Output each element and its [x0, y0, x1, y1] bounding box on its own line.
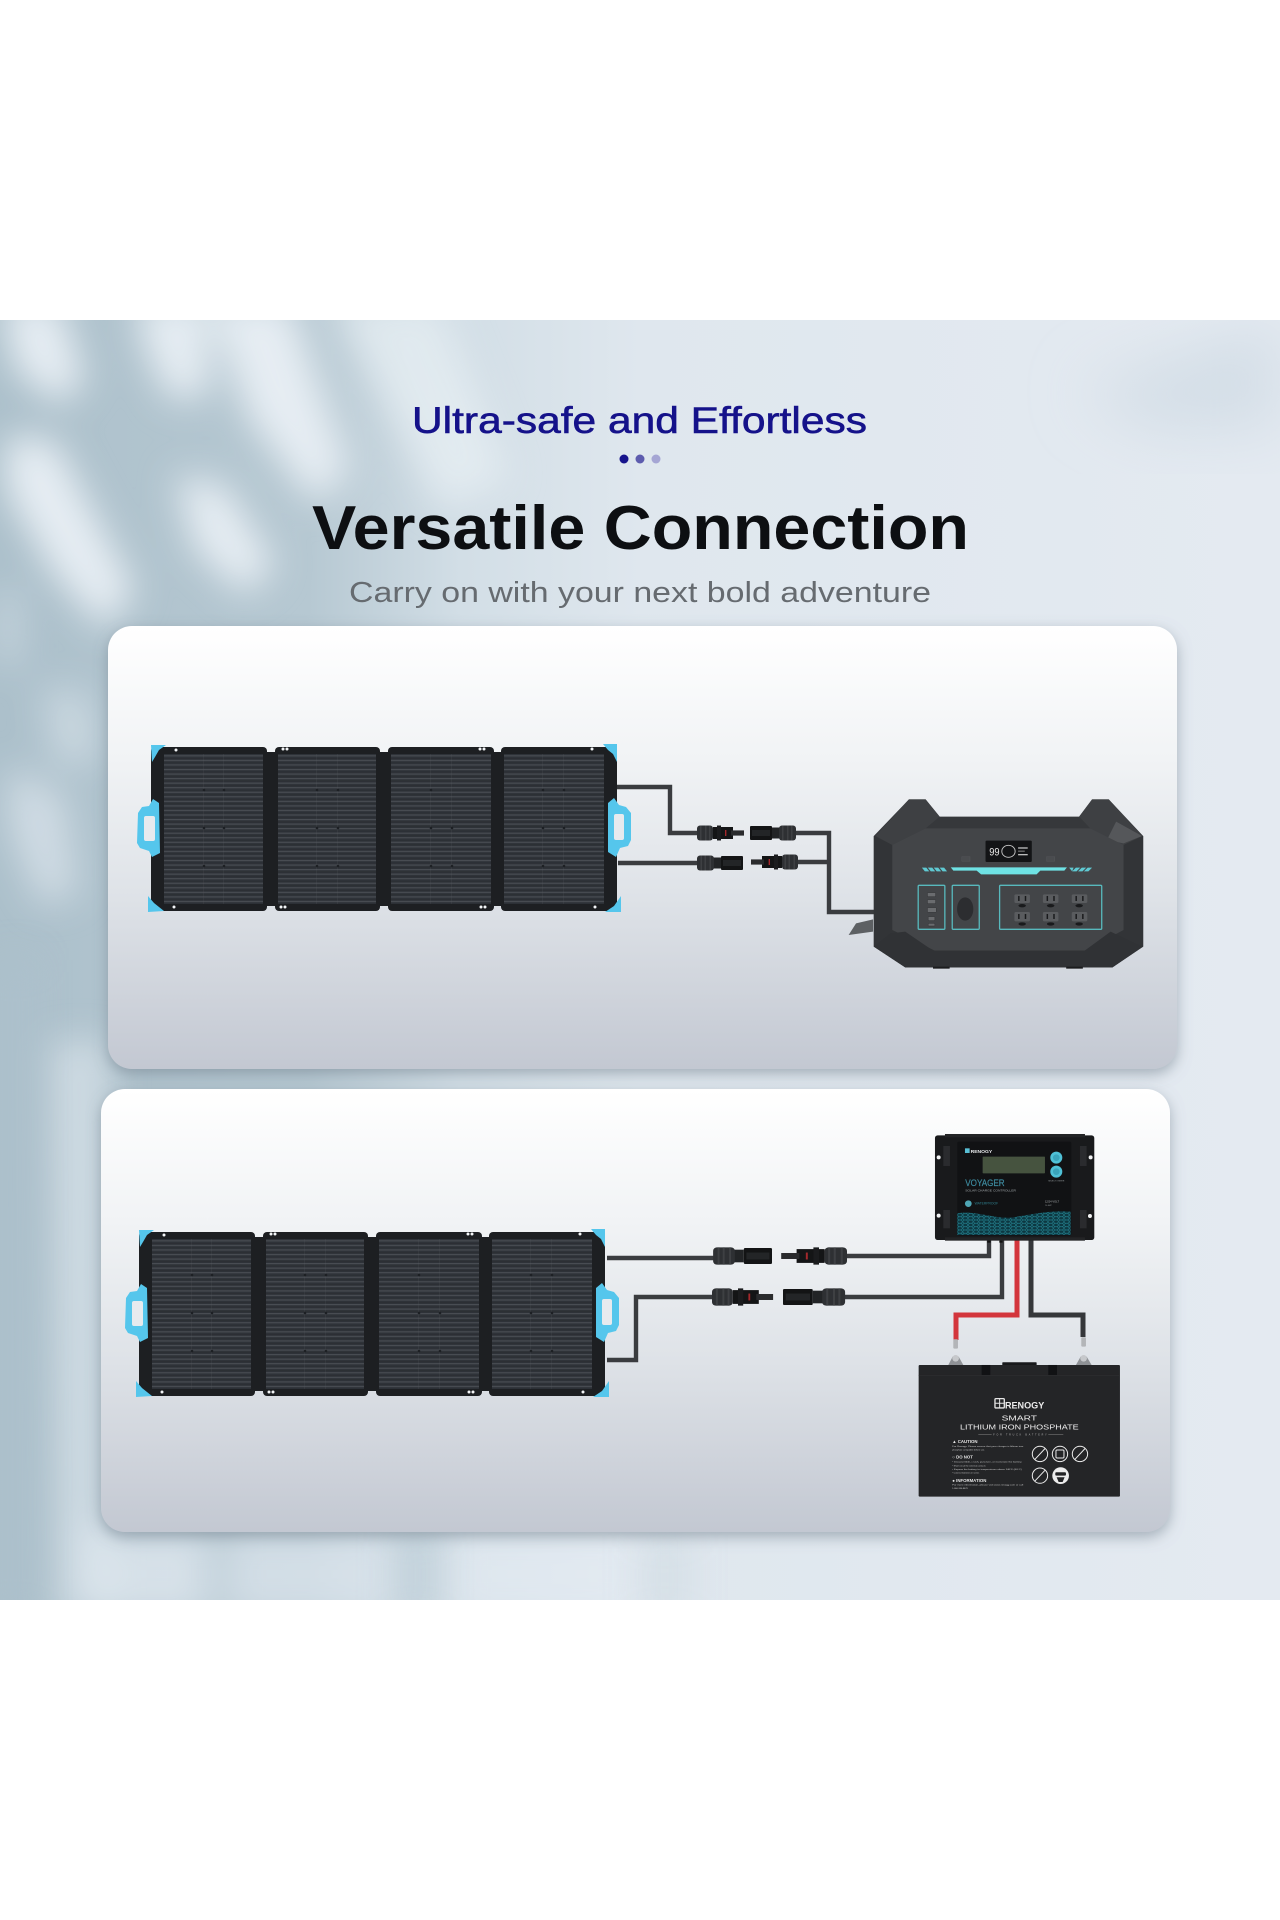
- feet: [933, 967, 950, 969]
- connector pair top: [713, 1247, 847, 1265]
- main title: Versatile Connection: [312, 494, 969, 563]
- icon: lithium battery: • Connect batteries in series: [952, 1472, 979, 1475]
- icon: charge controller: 20 AMP: [1045, 1204, 1053, 1207]
- icon: lithium battery: LITHIUM IRON PHOSPHATE: [960, 1422, 1079, 1431]
- kickstand: [849, 919, 873, 935]
- icon: lithium battery: ○ DO NOT: [952, 1455, 973, 1460]
- icon: lithium battery: 1-800-330-8678: [952, 1488, 968, 1490]
- display: [986, 841, 1032, 862]
- icon: lithium battery: • Expose the battery to temperatures above 140°F (60°C): [952, 1468, 1022, 1471]
- icon: portable power station: [849, 799, 1143, 969]
- three decorative dots: [620, 454, 660, 464]
- icon: lithium battery: • Disassemble, crush, puncture, or incinerate the battery: [952, 1461, 1023, 1464]
- terminals: [948, 1337, 1092, 1365]
- icon: charge controller: RENOGY: [971, 1149, 993, 1155]
- solar panel 1: [137, 744, 631, 912]
- cables to power station: [617, 787, 874, 912]
- teal light bar: [951, 867, 1067, 874]
- icon: lithium battery: ● INFORMATION: [952, 1478, 986, 1483]
- icon: charge controller: SOLAR CHARGE CONTROLLER: [965, 1188, 1017, 1192]
- DC socket: [957, 897, 973, 921]
- connector pair bottom: [712, 1288, 845, 1306]
- icon: lithium battery: • Short circuit the external contacts: [952, 1464, 986, 1467]
- icon: charge controller: VOYAGER: [965, 1178, 1005, 1188]
- icon: lithium battery: For more information, please visit www.renogy.com or call: [952, 1484, 1024, 1487]
- icon: portable power station: 99: [989, 847, 1000, 858]
- solar cables to controller: [607, 1240, 1002, 1360]
- icon: lithium battery: phosphate compatible before use.: [952, 1448, 985, 1451]
- battery cable black: [1031, 1238, 1083, 1337]
- background band with leaf shadows: [0, 300, 1280, 1620]
- safety icons: [1032, 1446, 1088, 1483]
- solar panel 2: [125, 1229, 619, 1397]
- side indicators: [962, 857, 970, 861]
- logo: [995, 1399, 1004, 1408]
- AC outlets: [1014, 894, 1087, 926]
- USB ports: [927, 893, 936, 926]
- panel: charge controller and battery card: [101, 1089, 1170, 1532]
- icon: charge controller: SELECT / ENTER: [1048, 1180, 1065, 1182]
- icon: charge controller: WATERPROOF: [975, 1202, 998, 1206]
- subtitle: Carry on with your next bold adventure: [349, 577, 931, 609]
- safety text: ▲ CAUTION: [952, 1439, 978, 1444]
- small heading: Ultra-safe and Effortless: [412, 400, 867, 441]
- icon: lithium battery: For Renogy: Please ensure that your charger is lithium iron: [952, 1445, 1024, 1448]
- battery cable red: [956, 1238, 1017, 1340]
- icon: lithium battery: FOR TRUCK BATTERY: [993, 1434, 1047, 1437]
- icon: charge controller: [935, 1134, 1094, 1243]
- port frames: [918, 885, 1102, 929]
- icon: lithium battery: SMART: [1002, 1414, 1037, 1423]
- icon: lithium battery: [919, 1337, 1120, 1497]
- connector pair bottom: [697, 854, 798, 870]
- station body: [874, 799, 1143, 967]
- icon: lithium battery: RENOGY: [1005, 1400, 1044, 1410]
- connector pair top: [697, 826, 796, 840]
- icon: charge controller: 12/24 VOLT: [1045, 1200, 1059, 1204]
- panel: power station connection card: [108, 626, 1177, 1069]
